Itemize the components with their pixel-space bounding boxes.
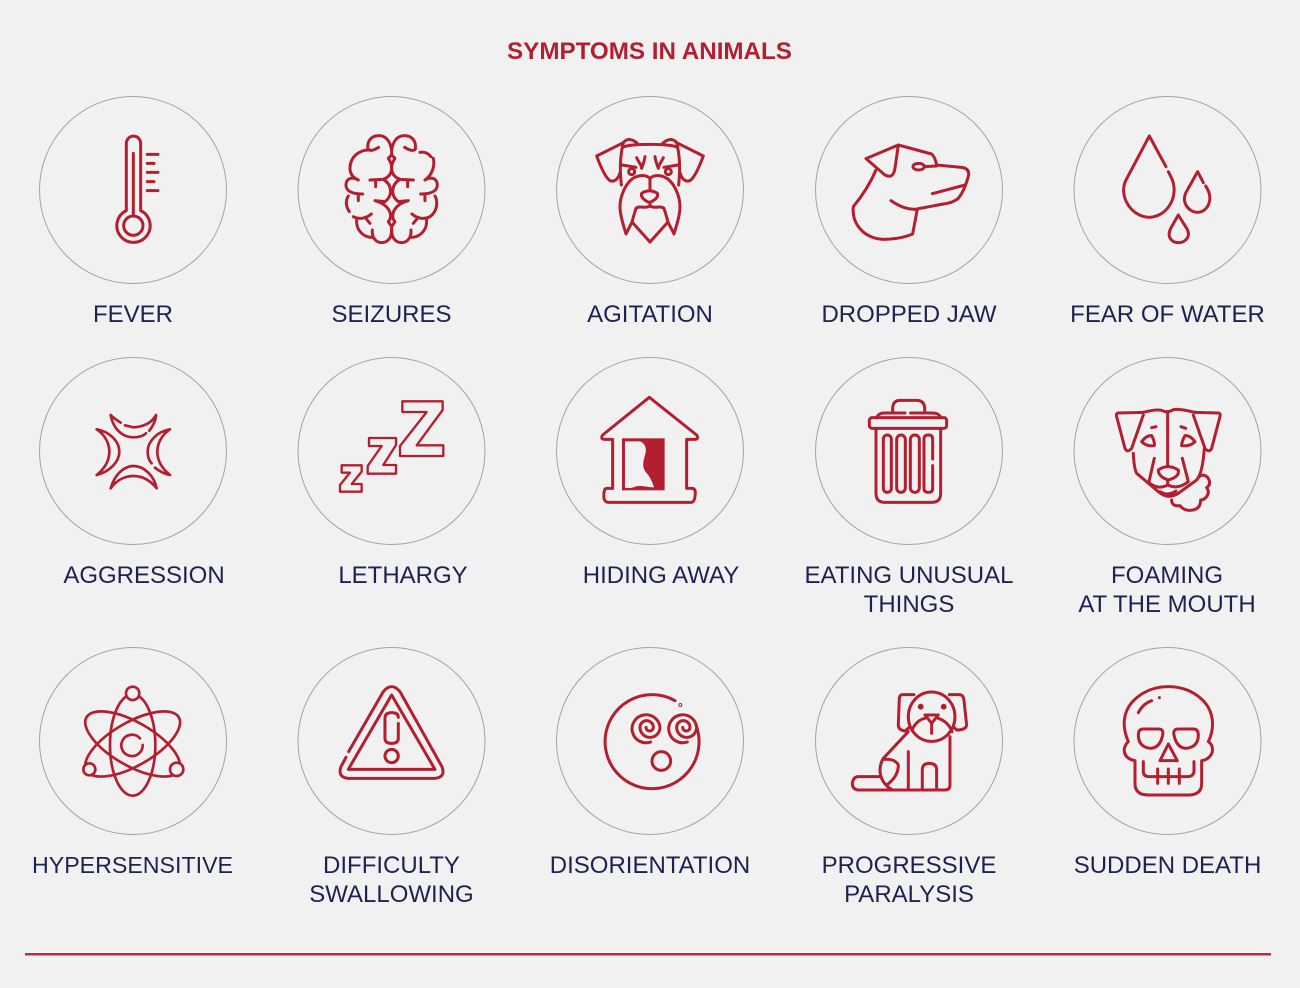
icon: water drops	[1124, 136, 1210, 243]
label: fever: FEVER	[93, 301, 173, 328]
panel: fear of water	[1070, 96, 1265, 328]
icon: house with hidden figure	[602, 397, 698, 502]
panel: foaming at the mouth	[1074, 358, 1261, 618]
label: eating unusual things: THINGS	[864, 591, 954, 618]
icon: trash can	[869, 400, 947, 502]
panel: progressive paralysis	[816, 648, 1002, 908]
label: hiding away: HIDING AWAY	[583, 562, 739, 589]
label: agitation: AGITATION	[587, 301, 713, 328]
icon: skull	[1124, 687, 1213, 795]
label: difficulty swallowing: SWALLOWING	[309, 881, 474, 908]
icon: thermometer	[117, 136, 158, 242]
panel: lethargy	[298, 358, 485, 589]
label: disorientation: DISORIENTATION	[550, 852, 750, 879]
label: foaming at the mouth: FOAMING	[1111, 562, 1223, 589]
icon: sitting dog	[852, 692, 967, 790]
icon: dog eye right	[941, 704, 947, 710]
icon: dog eye left	[918, 704, 924, 710]
label: eating unusual things: EATING UNUSUAL	[805, 562, 1013, 589]
panel: agitation	[556, 96, 744, 328]
icon: schnauzer face	[597, 139, 703, 242]
label: dropped jaw: DROPPED JAW	[821, 301, 997, 328]
label: progressive paralysis: PARALYSIS	[844, 881, 974, 908]
icon: brain	[346, 136, 437, 243]
panel: disorientation	[550, 648, 750, 879]
icon: dog with foam	[1116, 409, 1220, 510]
panel: difficulty swallowing	[298, 648, 485, 908]
label: foaming at the mouth: AT THE MOUTH	[1078, 591, 1256, 618]
icon: sleeping z letters	[340, 401, 443, 492]
icon: anger mark	[97, 415, 170, 488]
panel: aggression	[40, 358, 226, 589]
title: SYMPTOMS IN ANIMALS	[507, 38, 792, 65]
icon: dog profile	[853, 145, 969, 239]
panel: dropped jaw	[816, 96, 1002, 328]
icon: dizzy face	[605, 695, 699, 789]
icon: atom	[76, 687, 190, 796]
label: hypersensitive: HYPERSENSITIVE	[32, 852, 233, 878]
panel: hiding away	[556, 358, 744, 589]
panel: seizures	[298, 96, 485, 328]
panel: hypersensitive	[32, 648, 233, 878]
label: sudden death: SUDDEN DEATH	[1074, 852, 1261, 879]
label: lethargy: LETHARGY	[338, 562, 468, 589]
label: difficulty swallowing: DIFFICULTY	[323, 852, 460, 879]
label: fear of water: FEAR OF WATER	[1070, 301, 1265, 328]
label: progressive paralysis: PROGRESSIVE	[822, 852, 996, 879]
label: aggression: AGGRESSION	[63, 562, 225, 589]
panel: fever	[40, 96, 226, 328]
icon: warning triangle	[340, 687, 443, 778]
label: seizures: SEIZURES	[331, 301, 452, 328]
panel: sudden death	[1074, 648, 1261, 879]
panel: eating unusual things	[805, 358, 1013, 618]
